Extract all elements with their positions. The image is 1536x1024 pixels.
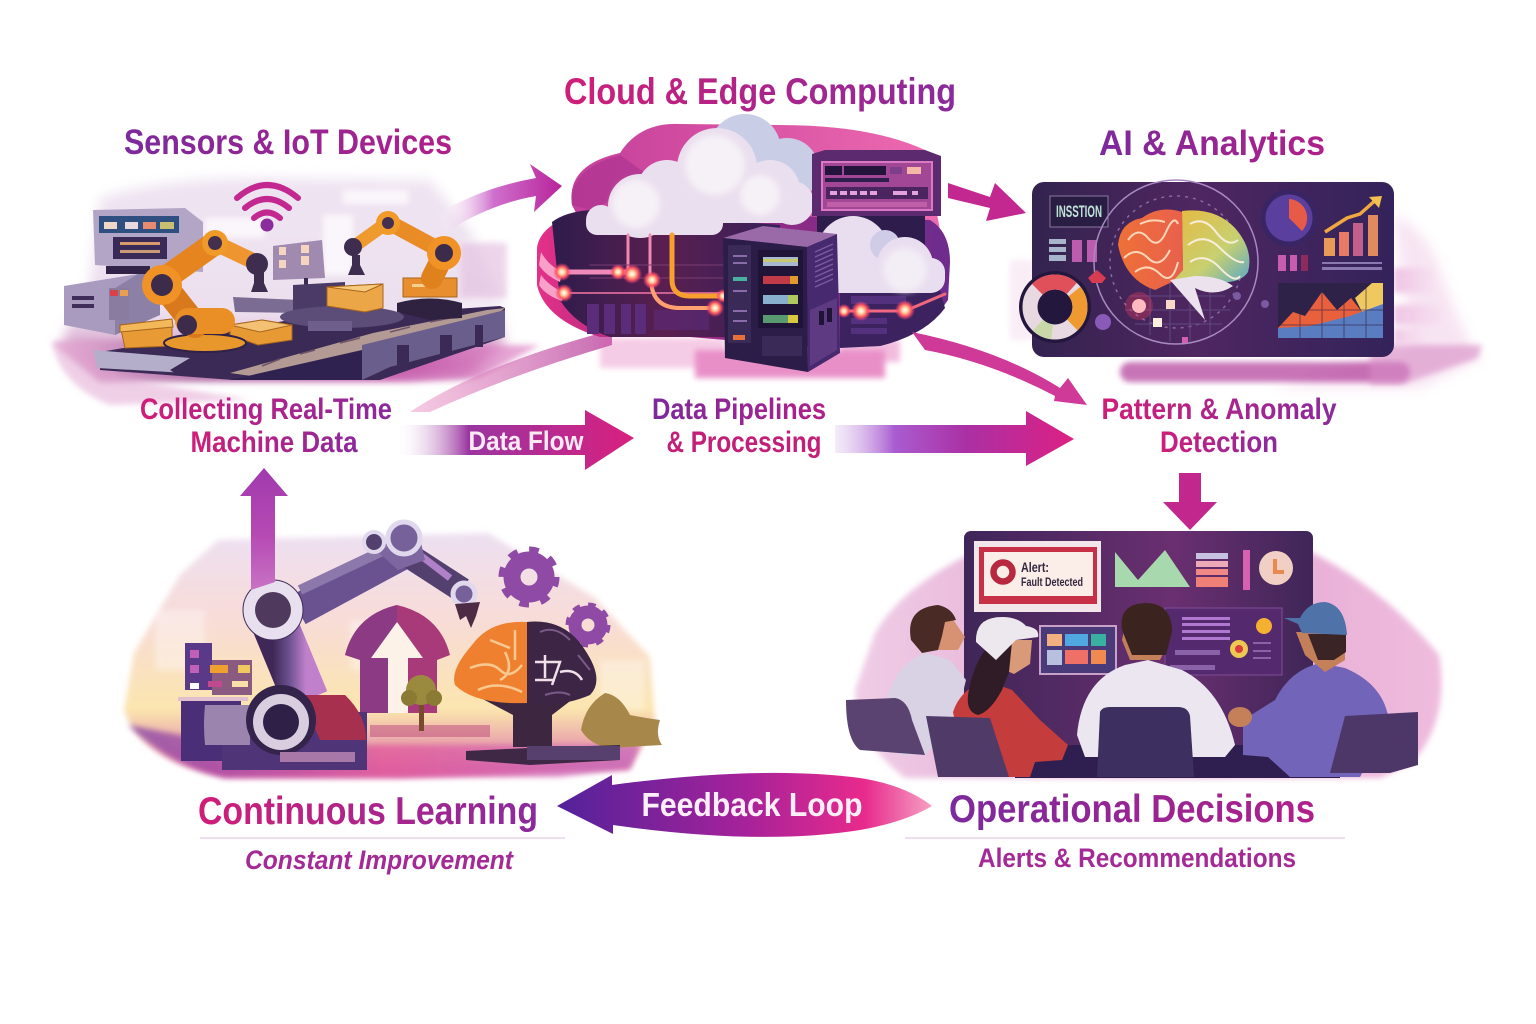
- icon: gears: [502, 550, 608, 645]
- target dots: [1088, 270, 1269, 343]
- panel: AI and analytics: [1010, 124, 1482, 459]
- tree: [401, 675, 442, 731]
- chair 1: [846, 698, 925, 755]
- chair 3: [1097, 707, 1194, 777]
- subheading: data pipelines: Data Pipelines: [652, 393, 826, 426]
- panel: cloud and edge computing: [537, 71, 956, 459]
- factory backdrop: [52, 178, 540, 405]
- arrow: pipelines to detection: [835, 411, 1074, 466]
- dashboard monitor: [1032, 182, 1394, 357]
- subheading: alerts: Alerts & Recommendations: [978, 843, 1296, 873]
- mini bars: [1278, 255, 1308, 271]
- robot arm right: [344, 211, 461, 278]
- robot base: [204, 685, 367, 770]
- server platform: [537, 210, 950, 348]
- insight label: INSSTION: [1056, 202, 1102, 221]
- pink backdrop: [1010, 215, 1482, 388]
- circuit lines: [562, 235, 945, 311]
- pink cloud backdrop: [571, 124, 940, 240]
- back clouds: [709, 114, 819, 202]
- icon: wifi signal: [237, 185, 298, 232]
- stacked bars: [1196, 550, 1250, 590]
- subheading: collecting data: Collecting Real-Time: [140, 393, 392, 426]
- pie chart: [1263, 192, 1315, 244]
- arrow: feedback loop: [557, 773, 932, 837]
- panel: sensors and IoT devices: [52, 123, 540, 459]
- lower screens: [1040, 608, 1282, 675]
- small bars: [1049, 239, 1097, 262]
- alert panel: Fault Detected: [1021, 575, 1083, 589]
- sunset backdrop: [124, 533, 655, 778]
- alert panel: [974, 541, 1101, 612]
- arrow: data flow: [398, 410, 634, 470]
- gauge: [1259, 551, 1293, 585]
- arrow: cloud to AI: [948, 183, 1026, 221]
- panel: operational decisions: [846, 531, 1441, 873]
- heading: learning: Continuous Learning: [198, 790, 538, 833]
- subheading: collecting data: Machine Data: [190, 426, 358, 459]
- right robot base: [397, 298, 462, 320]
- person: man in blue cap: [1228, 602, 1389, 777]
- arrow: swoosh from sensors to cloud base: [410, 330, 612, 412]
- mountain chart: [1115, 550, 1190, 587]
- rack unit top: [812, 150, 941, 251]
- subheading: pattern detection: [1102, 393, 1337, 459]
- area chart: [1278, 283, 1383, 338]
- chair 4: [1330, 712, 1418, 773]
- divider: [200, 837, 565, 839]
- subheading: pattern detection: Detection: [1160, 426, 1278, 459]
- arrow: data flow: Data Flow: [468, 426, 584, 456]
- purple dot: [1095, 314, 1111, 330]
- arrow: feedback loop: Feedback Loop: [642, 786, 862, 823]
- subheading: data pipelines: & Processing: [666, 426, 822, 459]
- icon: glowing brain on pedestal: [454, 622, 620, 765]
- chair 2: [926, 716, 1009, 777]
- upward arrow house: [345, 605, 450, 713]
- right clouds: [817, 216, 945, 293]
- machine cabinets: [64, 208, 203, 335]
- pink backdrop: [855, 553, 1441, 778]
- server tower: [723, 226, 840, 372]
- control room monitor: [964, 531, 1313, 763]
- person: woman in red: [953, 617, 1068, 777]
- insight label: [1050, 196, 1108, 227]
- panel: continuous learning: [124, 522, 662, 875]
- donut chart: [1019, 271, 1091, 343]
- robotic arm: [243, 522, 480, 700]
- small factory: [178, 643, 252, 761]
- subheading: collecting data: [140, 393, 392, 459]
- arrow: sensors to cloud: [438, 164, 562, 232]
- heading: cloud: Cloud & Edge Computing: [564, 71, 956, 112]
- arrow: detection to decisions: [1163, 473, 1217, 530]
- glowing nodes: [553, 263, 915, 321]
- conveyor belt: [93, 282, 505, 380]
- subheading: pattern detection: Pattern & Anomaly: [1102, 393, 1337, 426]
- person: man in white shirt: [887, 605, 966, 755]
- factory building: [273, 240, 325, 293]
- person: man at centre: [1077, 603, 1235, 757]
- icon: brain: [1094, 180, 1258, 344]
- rising bar chart: [1322, 196, 1382, 270]
- heading: decisions: Operational Decisions: [949, 788, 1315, 831]
- boxes on conveyor: [120, 278, 457, 348]
- alert panel: Alert:: [1021, 559, 1049, 575]
- robot arm left: [142, 230, 268, 352]
- subheading: constant improvement: Constant Improvement: [245, 845, 514, 875]
- subheading: data pipelines: [652, 393, 826, 459]
- shrub: [581, 693, 662, 748]
- arrow: learning back to sensors: [240, 468, 288, 590]
- arrow: cloud curve to detection: [912, 332, 1087, 405]
- divider: [905, 837, 1345, 839]
- pink ground reflection: [600, 338, 900, 378]
- heading: AI: AI & Analytics: [1099, 124, 1325, 163]
- white clouds: [586, 128, 814, 238]
- heading: sensors: Sensors & IoT Devices: [124, 123, 452, 162]
- desk: [1015, 745, 1340, 778]
